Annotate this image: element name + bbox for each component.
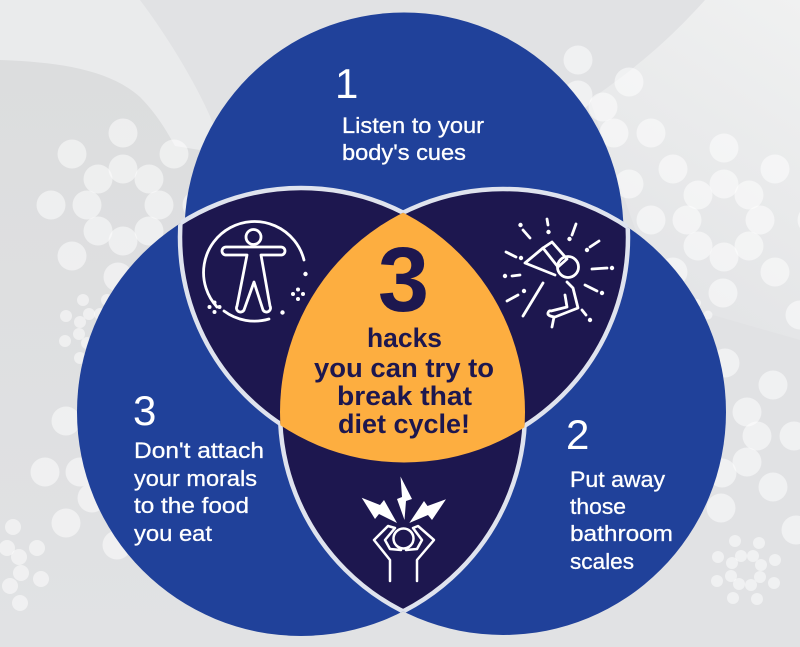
panel text 2: 2 xyxy=(566,411,589,458)
panel text 1: body's cues xyxy=(342,140,466,165)
venn centre: orange xyxy=(280,212,525,462)
centre text: diet cycle! xyxy=(338,409,470,439)
venn outlines xyxy=(178,186,630,612)
panel text 1: Listen to your xyxy=(342,113,485,138)
centre text xyxy=(314,323,494,439)
panel text 2: scales xyxy=(570,549,634,574)
heading number 3: 3 xyxy=(378,229,429,331)
panel text 2 xyxy=(566,411,673,574)
centre text: you can try to xyxy=(314,353,494,383)
panel text 3: 3 xyxy=(133,387,156,434)
venn overlaps: dark lenses xyxy=(182,190,626,609)
panel text 3: Don't attach xyxy=(134,438,264,463)
panel text 3: to the food xyxy=(134,493,249,518)
icon: headache person xyxy=(362,476,446,581)
venn circles: blue xyxy=(77,12,726,636)
centre text: hacks xyxy=(367,323,442,353)
panel text 3: your morals xyxy=(134,466,257,491)
panel text 2: bathroom xyxy=(570,521,673,546)
panel text 2: those xyxy=(570,494,626,519)
panel text 1: 1 xyxy=(335,60,358,107)
centre text: break that xyxy=(337,381,472,411)
icon: dizzy figure xyxy=(503,219,614,327)
panel text 3: you eat xyxy=(134,521,213,546)
panel text 3 xyxy=(133,387,264,546)
icon: body in circle xyxy=(204,221,308,321)
panel text 1 xyxy=(335,60,485,165)
panel text 2: Put away xyxy=(570,467,666,492)
